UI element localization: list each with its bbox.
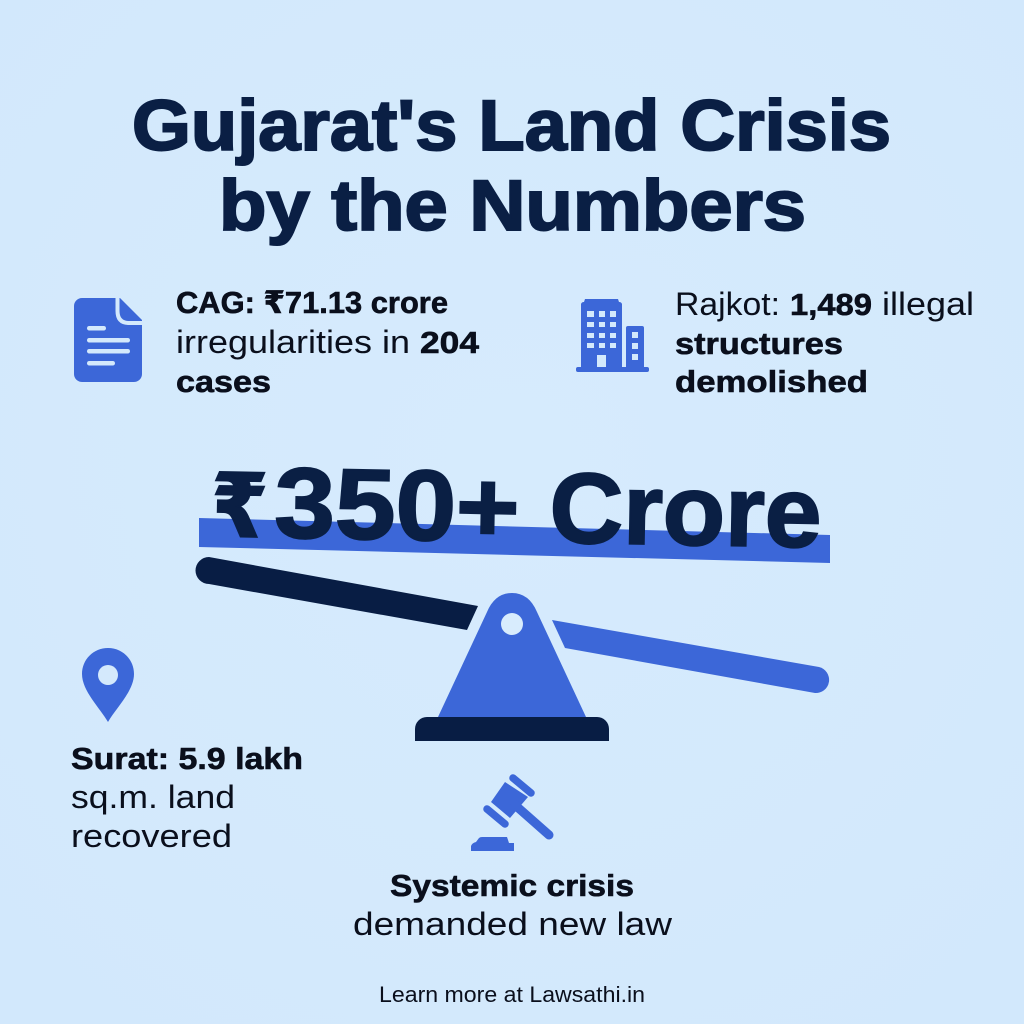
headline figure: ₹ [211,456,268,556]
stat: Rajkot demolitions [675,286,974,399]
stat: Rajkot demolitions: structures [675,326,843,361]
stat: Surat land recovered: sq.m. land [71,779,235,815]
stat: CAG irregularities: cases [176,364,271,399]
stat: systemic crisis: Systemic crisis [390,868,634,903]
blue highlight bar [199,518,830,563]
stat: CAG irregularities: irregularities in [176,324,410,360]
icon: building [576,299,649,372]
icon: document [74,297,143,382]
stat: systemic crisis [353,868,673,942]
stat: Surat land recovered [71,741,303,854]
headline figure: Crore [549,452,823,569]
title [132,87,891,246]
stat: Rajkot demolitions: demolished [675,364,868,399]
stat: Rajkot demolitions: illegal [882,286,974,322]
stat: Rajkot demolitions: 1,489 [790,287,872,322]
stat: CAG irregularities [176,285,480,399]
title: Gujarat's Land Crisis [132,87,891,166]
stat: CAG irregularities: 204 [420,325,480,360]
stat: CAG irregularities: CAG: ₹71.13 crore [176,285,448,320]
title: by the Numbers [219,167,806,246]
headline figure: 350+ [274,447,521,564]
stat: systemic crisis: demanded new law [353,906,673,942]
footer: Learn more at Lawsathi.in [379,982,645,1007]
icon: location pin [82,648,134,722]
stat: Surat land recovered: recovered [71,818,232,854]
seesaw scale illustration [196,557,829,741]
stat: Rajkot demolitions: Rajkot: [675,286,780,322]
icon: gavel [471,778,549,851]
headline figure [211,446,823,569]
stat: Surat land recovered: Surat: 5.9 lakh [71,741,303,776]
